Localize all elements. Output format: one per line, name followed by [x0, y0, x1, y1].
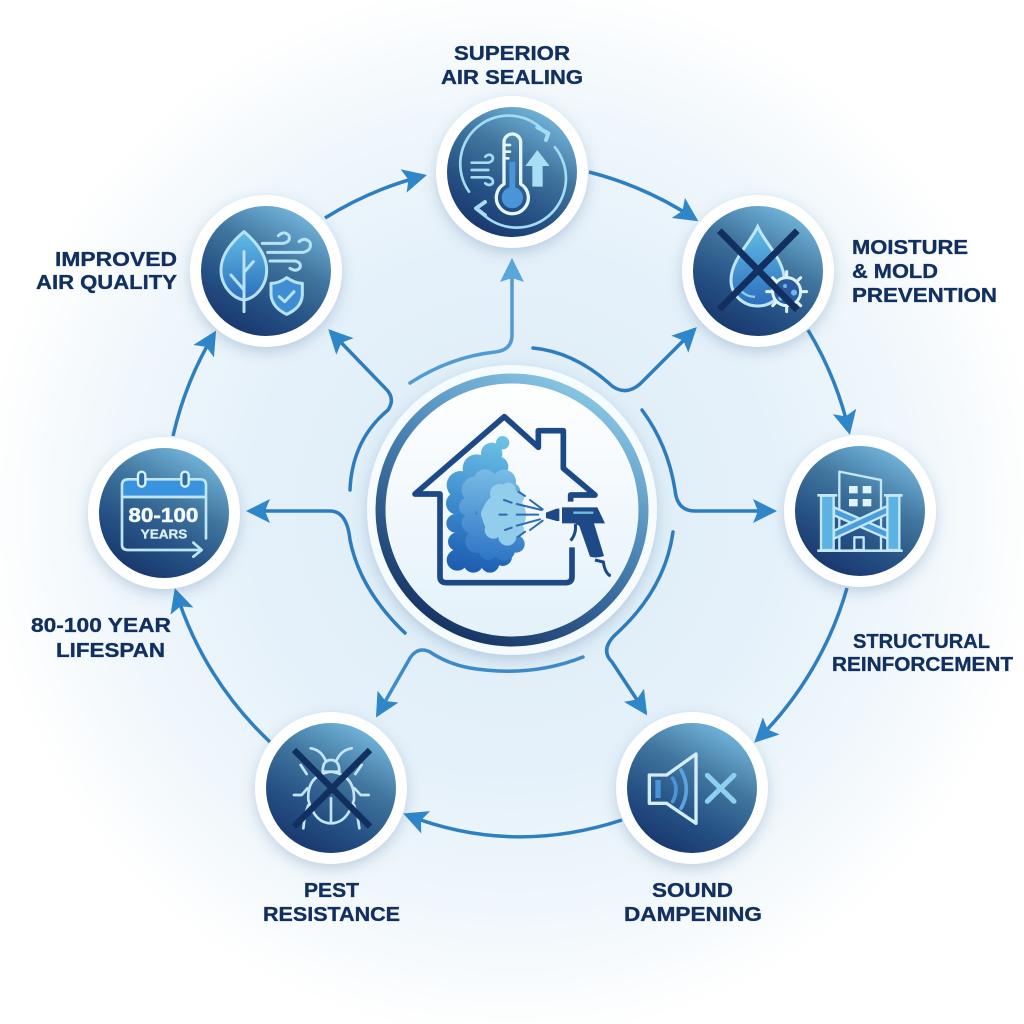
- node: pest resistance: [255, 712, 407, 864]
- label: superior air sealing: AIR SEALING: [441, 67, 583, 89]
- label: sound dampening: DAMPENING: [624, 904, 762, 926]
- foam front layer: [481, 483, 526, 546]
- node: sound dampening: [616, 712, 768, 864]
- label: pest resistance: RESISTANCE: [263, 904, 400, 926]
- spray gun: [546, 507, 611, 576]
- label: sound dampening: [624, 880, 762, 926]
- icon: muted speaker: [649, 754, 734, 823]
- icon: leaf, wind and shield: [221, 232, 310, 314]
- node: superior air sealing: [436, 96, 588, 248]
- label: moisture and mold prevention: MOISTURE: [852, 237, 968, 259]
- icon: house with foam and spray gun: [415, 417, 611, 583]
- icon: braced building: [817, 472, 903, 551]
- foam back layer: [446, 436, 512, 573]
- label: 80-100 year lifespan: 80-100 YEAR: [31, 615, 172, 637]
- label: sound dampening: SOUND: [652, 880, 733, 902]
- label: moisture and mold prevention: & MOLD: [852, 261, 938, 283]
- label: structural reinforcement: REINFORCEMENT: [832, 654, 1013, 676]
- foam middle layer: [459, 469, 525, 561]
- icon: calendar with years: YEARS: [141, 528, 187, 542]
- label: pest resistance: PEST: [304, 880, 359, 902]
- spray lines: [499, 492, 543, 537]
- icon: calendar with years: [122, 472, 206, 557]
- node: structural reinforcement: [784, 435, 936, 587]
- label: structural reinforcement: [832, 631, 1013, 676]
- label: improved air quality: [36, 249, 178, 294]
- label: 80-100 year lifespan: [31, 615, 172, 662]
- label: moisture and mold prevention: [852, 237, 997, 307]
- icon: crossed insect: [294, 748, 370, 828]
- node: improved air quality: [190, 195, 342, 347]
- node: 80-100 year lifespan: [88, 437, 240, 589]
- icon: calendar with years: 80-100: [128, 504, 198, 527]
- label: pest resistance: [263, 880, 400, 926]
- label: superior air sealing: SUPERIOR: [454, 43, 571, 65]
- inner connector arrows: [250, 262, 773, 714]
- outer cycle arrows: [173, 172, 849, 837]
- house outline: [415, 417, 595, 583]
- node: moisture and mold prevention: [682, 195, 834, 347]
- icon: crossed water drop and mold: [719, 227, 807, 312]
- label: structural reinforcement: STRUCTURAL: [853, 631, 990, 653]
- icon: thermometer with airflow: [460, 116, 566, 228]
- label: 80-100 year lifespan: LIFESPAN: [56, 640, 165, 662]
- label: improved air quality: AIR QUALITY: [36, 272, 178, 294]
- label: superior air sealing: [441, 43, 583, 89]
- label: improved air quality: IMPROVED: [55, 249, 177, 271]
- center badge: spray foam house: [367, 365, 657, 655]
- label: moisture and mold prevention: PREVENTION: [852, 285, 997, 307]
